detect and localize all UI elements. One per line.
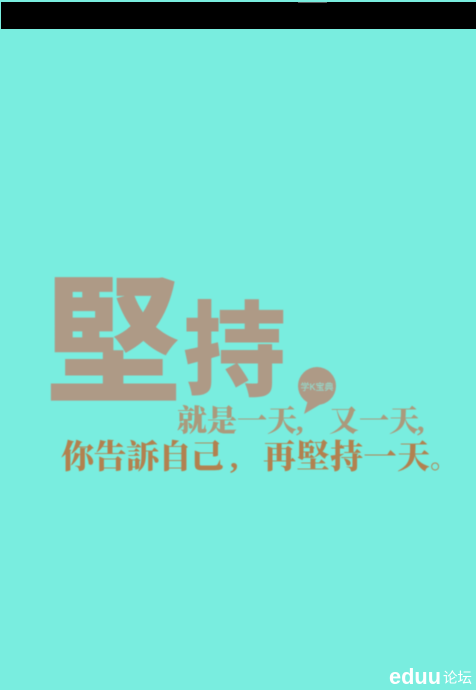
icon: speech bubble badge: 学K宝典: [300, 381, 334, 392]
tagline line 2: 再堅持一天: [263, 439, 430, 476]
tagline line 1: 又一天: [329, 405, 419, 438]
watermark: eduu 论坛: 论坛: [443, 670, 472, 687]
main title: 堅持: [45, 267, 286, 420]
top black bar: [1, 2, 476, 29]
main title: 堅持: 持: [183, 294, 286, 409]
tagline line 2: 。: [430, 444, 458, 475]
tagline line 1: ,: [296, 405, 304, 438]
tagline line 1: [177, 404, 424, 438]
tagline line 2: 你告訴自己: [61, 439, 224, 476]
tagline line 1: 就是一天: [177, 404, 297, 438]
icon: speech bubble badge: [298, 367, 336, 414]
watermark: eduu 论坛: [389, 664, 472, 689]
tagline line 2: [61, 439, 458, 476]
watermark: eduu 论坛: eduu: [389, 664, 441, 689]
main title: 堅持: 堅: [45, 267, 182, 420]
tagline line 2: ,: [230, 440, 238, 476]
tagline line 1: ,: [417, 405, 424, 438]
